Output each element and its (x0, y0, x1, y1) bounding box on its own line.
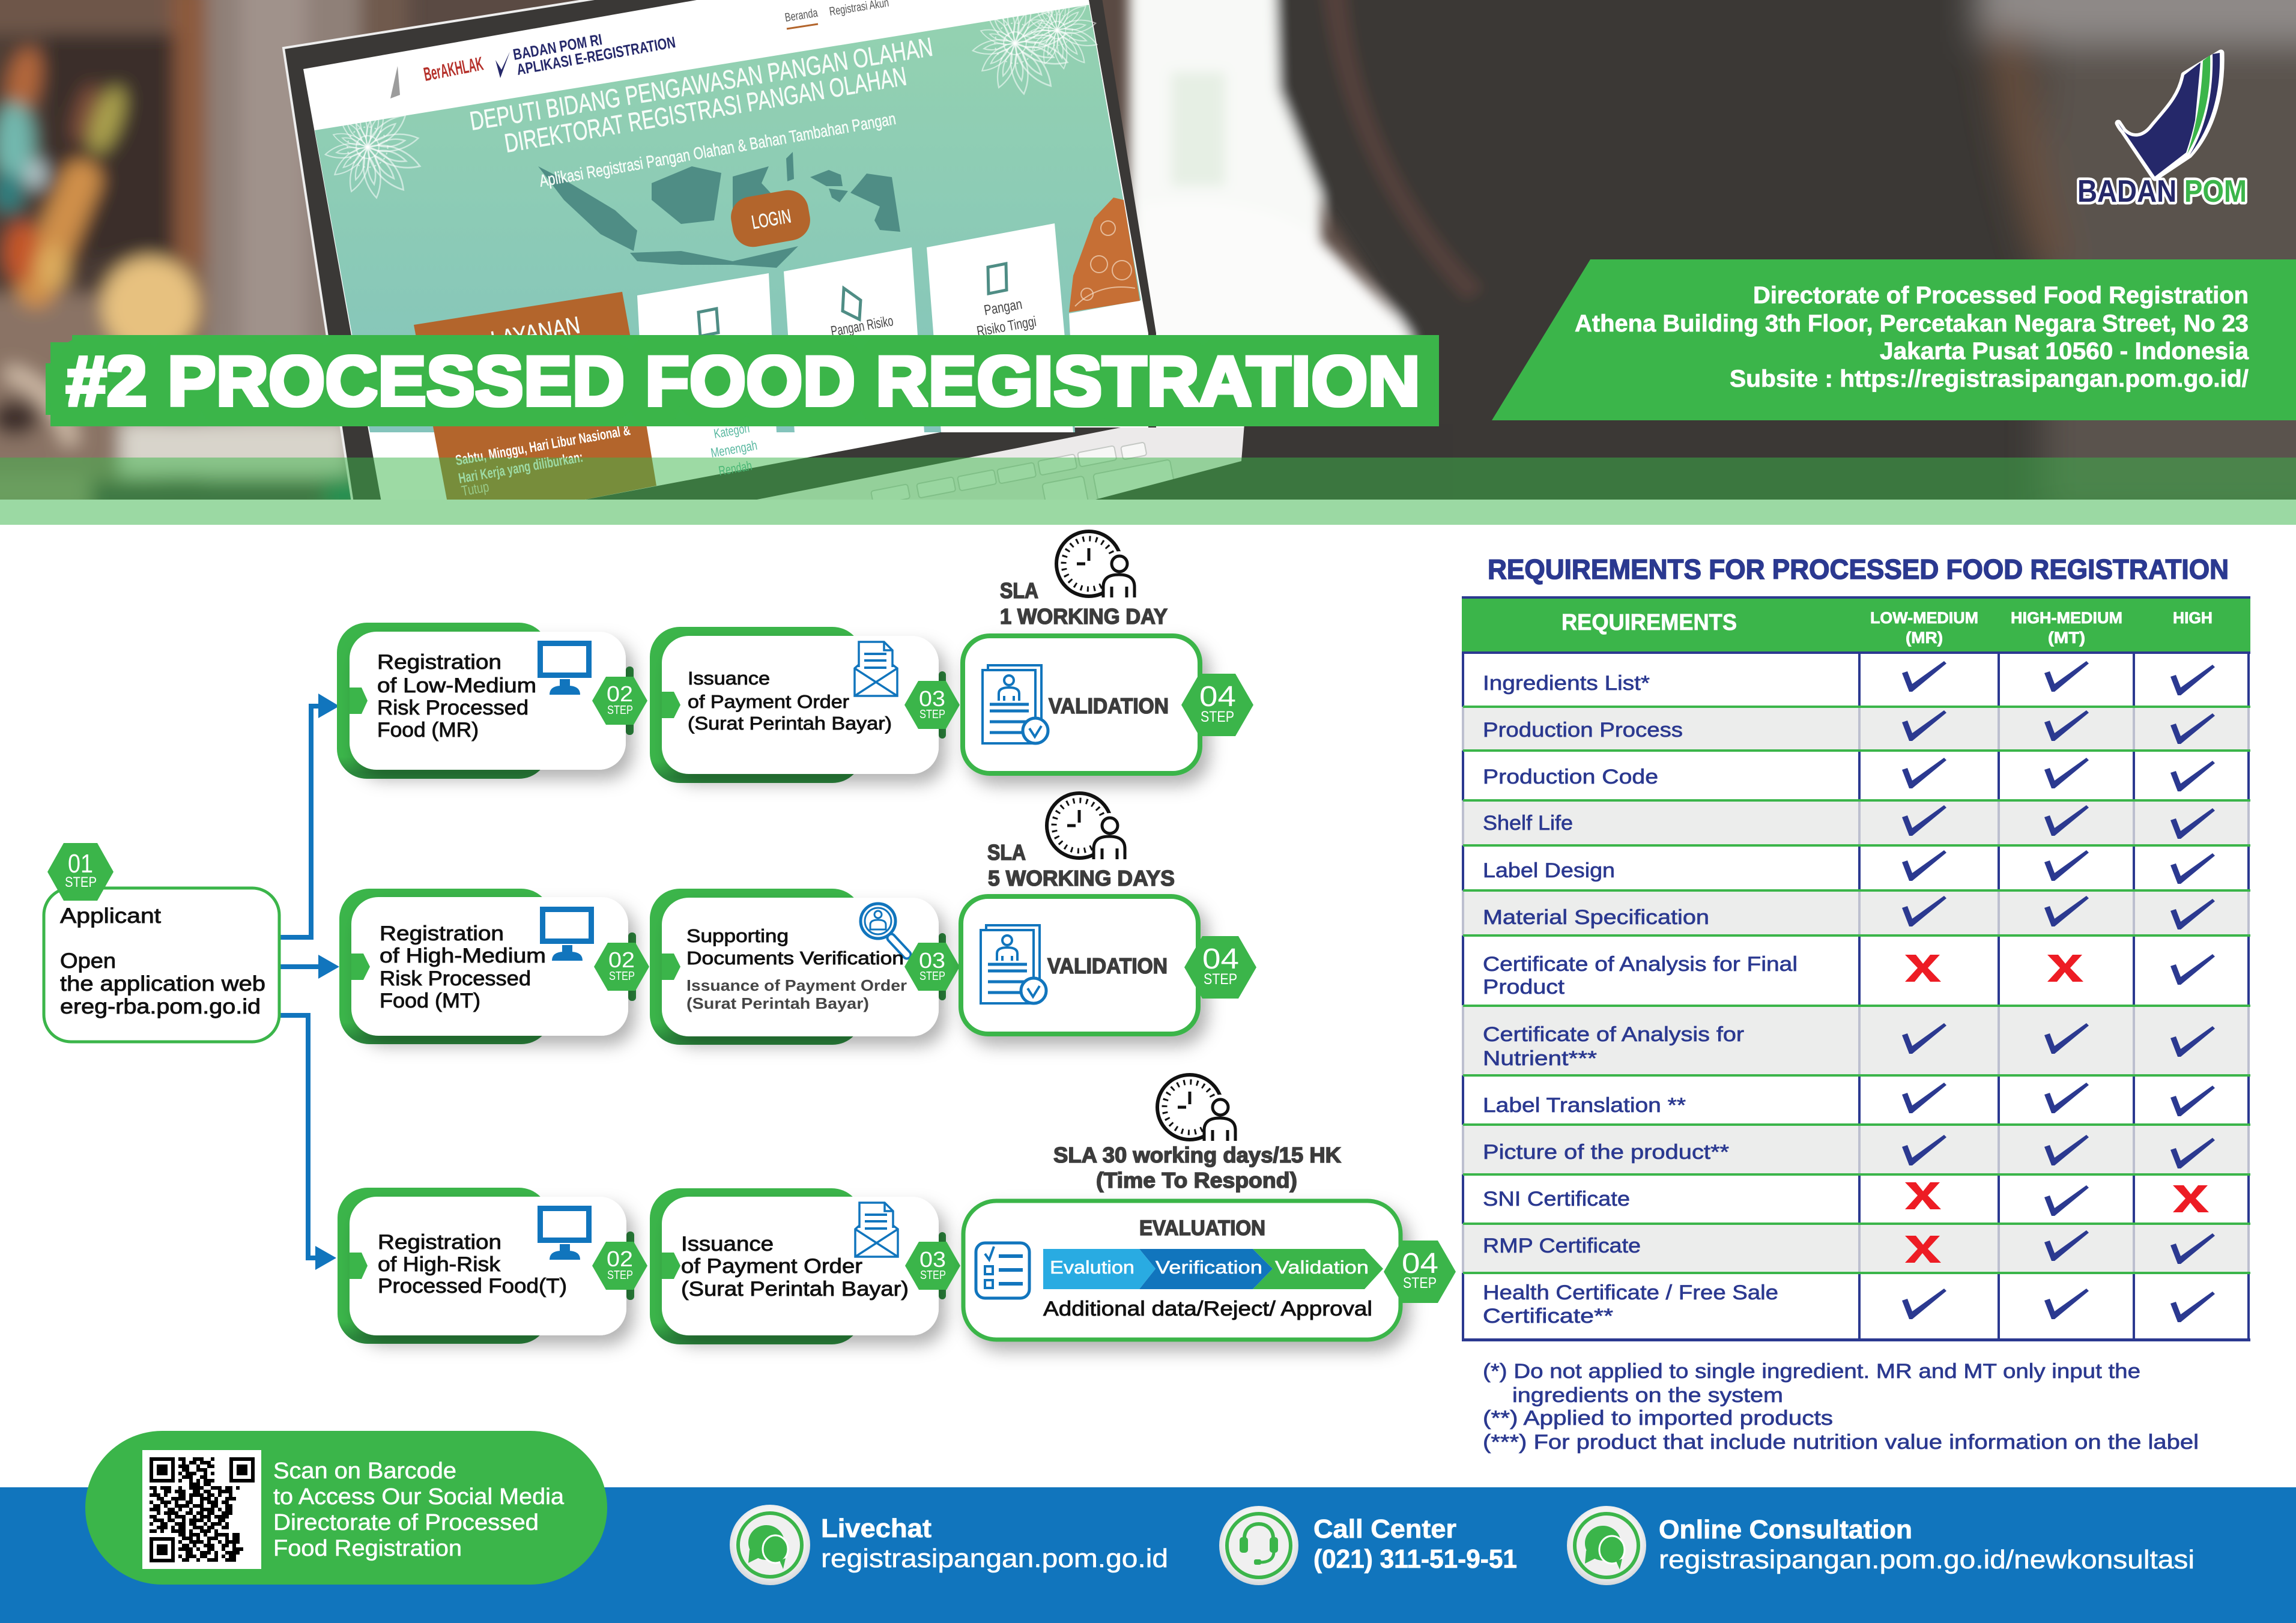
QR caption: Scan on Barcode (273, 1458, 456, 1484)
SLA text row 1: 1 WORKING DAY (1000, 604, 1168, 629)
card text (377, 651, 536, 742)
badge: step 04: 04 (1402, 1248, 1438, 1280)
title banner: #2 PROCESSED FOOD REGISTRATION (66, 342, 1420, 420)
QR caption: Food Registration (273, 1536, 462, 1561)
screen: top nav and logos: APLIKASI E-REGISTRATION (515, 33, 677, 79)
translucent green strip (0, 458, 2296, 501)
heading: requirements: REQUIREMENTS FOR PROCESSED FOOD REGISTRATION (1488, 554, 2229, 585)
badge: step 04: STEP (1204, 971, 1237, 988)
card text (688, 668, 892, 734)
icon: envelope with document (855, 1203, 898, 1257)
table footnotes (1483, 1360, 2199, 1454)
light green band (0, 500, 2296, 525)
card text: (Surat Perintah Bayar) (688, 713, 892, 734)
row: SNI Certificate: SNI Certificate (1483, 1188, 1630, 1210)
row: Health Certificate / Free Sale Certificate (1483, 1281, 2215, 1328)
contact: Online Consultation: Online Consultation (1659, 1515, 1912, 1544)
card text: Food (MT) (380, 990, 480, 1012)
screen: login button: LOGIN (750, 205, 793, 233)
laptop keyboard deck (742, 424, 1453, 510)
icon: headset (1219, 1506, 1298, 1585)
card text: Issuance (688, 668, 770, 689)
badge: step 02: STEP (607, 704, 633, 717)
panel: step 3 issuance of payment order row 3 (650, 1188, 960, 1344)
laptop bezel and chin (283, 0, 1156, 503)
card text: Registration (377, 651, 501, 674)
table footnotes: (**) Applied to imported products (1483, 1407, 1833, 1430)
panel: step 3 supporting documents verification (650, 889, 960, 1045)
badge: step 04: 04 (1202, 943, 1239, 975)
screen: top nav and logos (390, 0, 890, 98)
validation label: VALIDATION (1049, 694, 1169, 718)
applicant text (60, 904, 265, 1018)
contact: Livechat: registrasipangan.pom.go.id (821, 1544, 1168, 1573)
screen: top nav and logos: BerAKHLAK (422, 52, 485, 85)
SLA text row 1 (1000, 578, 1168, 629)
address text (1575, 282, 2249, 392)
table: requirements matrix (1462, 596, 2250, 1341)
panel: step 4 validation row 1 (963, 636, 1253, 773)
screen: Indonesia map (538, 152, 900, 268)
card text: Issuance (681, 1233, 774, 1256)
screen: login button (728, 187, 813, 250)
screen: lower panel text: Menengah (710, 438, 759, 461)
row: Label Translation: Label Translation ** (1483, 1094, 1686, 1117)
icon: SLA clock row 1 (1056, 531, 1134, 597)
screen: lower panel text: Kategori (713, 420, 751, 441)
badge: step 02 (592, 1242, 647, 1290)
table footnotes: (*) Do not applied to single ingredient. MR and MT only input the (1483, 1360, 2140, 1383)
row: Production Process: Production Process (1483, 719, 1683, 742)
row: Certificate of Analysis for Final Product (1483, 953, 2215, 999)
table header row: (MR) (1906, 629, 1943, 647)
row: Health Certificate / Free Sale Certificate: Certificate** (1483, 1305, 1613, 1328)
address text: Jakarta Pusat 10560 - Indonesia (1880, 338, 2249, 364)
row: Certificate of Analysis for Nutrient: Nutrient*** (1483, 1047, 1597, 1070)
table footnotes: ingredients on the system (1512, 1384, 1783, 1407)
row: Production Code: Production Code (1483, 766, 1658, 788)
panel: step 4 evaluation (963, 1201, 1456, 1340)
card subtext: Issuance of Payment Order (686, 976, 907, 994)
card text (686, 925, 904, 969)
QR caption (273, 1458, 565, 1561)
row: Label Design (1483, 850, 2215, 884)
screen: heading text: DIREKTORAT REGISTRASI PANGAN OLAHAN (502, 61, 909, 159)
icon: SLA clock row 3 (1157, 1075, 1235, 1141)
process arrow: evaluation, verification, validation: Verification (1156, 1257, 1262, 1278)
SLA text row 2: SLA (987, 840, 1026, 865)
card text: Documents Verification (686, 948, 904, 969)
row: Material Specification: Material Specification (1483, 906, 1709, 929)
arrow connectors from applicant to registration cards (277, 694, 339, 1270)
row: Certificate of Analysis for Final Product: Certificate of Analysis for Final (1483, 953, 1798, 976)
badge: step 01: 01 (68, 849, 93, 878)
process arrow: evaluation, verification, validation (1043, 1249, 1383, 1289)
laptop edge highlight (282, 0, 595, 500)
panel: directorate address (1492, 259, 2296, 420)
screen: lower panel text: Pangan Risiko (829, 313, 894, 340)
contact: Call Center: Call Center (1313, 1514, 1456, 1544)
icon: chat bubbles (730, 1505, 810, 1585)
card text: Registration (380, 922, 504, 945)
process arrow: evaluation, verification, validation: Evalution (1050, 1257, 1134, 1278)
screen: lower panel text: Sabtu, Minggu, Hari Libur Nasional & (454, 422, 632, 469)
screen: top nav and logos: BADAN POM RI (512, 30, 604, 64)
badge: step 02: STEP (607, 1269, 633, 1282)
panel: step 3 issuance of payment order row 1 (650, 627, 960, 783)
card text: Registration (378, 1231, 501, 1254)
row: Production Code (1483, 758, 2215, 791)
row: Shelf Life (1483, 805, 2215, 839)
row: Ingredients List (1483, 661, 2215, 695)
screen: heading text: Aplikasi Registrasi Pangan Olahan & Bahan Tambahan Pangan (538, 109, 897, 190)
applicant text: ereg-rba.pom.go.id (60, 995, 261, 1018)
row: Health Certificate / Free Sale Certificate: Health Certificate / Free Sale (1483, 1281, 1778, 1304)
panel: QR code pill (85, 1431, 607, 1585)
card text: of Low-Medium (377, 674, 536, 697)
card text: of Payment Order (681, 1255, 862, 1278)
screen: lower panel text (454, 296, 1038, 500)
table row fills and grid (1462, 654, 2250, 1341)
icon: SLA clock row 2 (1047, 793, 1125, 859)
screen paisley ornaments (324, 0, 1099, 199)
table footnotes: (***) For product that include nutrition value information on the label (1483, 1431, 2199, 1454)
badge: step 02 (592, 677, 647, 725)
header photo: laptop on a desk with blurred background (0, 0, 2296, 540)
icon: QR code (150, 1459, 253, 1561)
laptop screen (303, 0, 1148, 503)
panel: step 2 registration high risk (338, 1188, 647, 1344)
row: Certificate of Analysis for Nutrient (1483, 1023, 2215, 1070)
applicant text: Applicant (60, 904, 161, 928)
screen: heading text: DEPUTI BIDANG PENGAWASAN PANGAN OLAHAN (468, 32, 935, 136)
row: Picture of the product (1483, 1135, 2215, 1168)
badge: step 03 (905, 1242, 960, 1290)
card text: of High-Risk (378, 1253, 501, 1276)
row: RMP Certificate (1483, 1230, 2215, 1264)
screen: lower panel text: Pangan (983, 296, 1023, 319)
logo: Badan POM (2077, 53, 2247, 209)
SLA text row 2 (987, 840, 1175, 890)
contact: Livechat: Livechat (821, 1514, 931, 1543)
blurred white background and hair (1119, 0, 2053, 500)
outcome text: Additional data/Reject/ Approval (1043, 1298, 1372, 1320)
address text: Subsite : https://registrasipangan.pom.go.id/ (1730, 366, 2249, 392)
card text: Risk Processed (377, 697, 529, 719)
card text: Food (MR) (377, 719, 479, 742)
icon: validated document (983, 665, 1048, 743)
screen: lower panel text: Tutup (460, 479, 490, 500)
badge: step 03: 03 (919, 948, 945, 973)
icon: chat bubbles (1567, 1506, 1646, 1585)
card subtext (686, 976, 907, 1012)
SLA text row 3: SLA 30 working days/15 HK (1053, 1143, 1341, 1167)
badge: step 03: STEP (919, 970, 945, 983)
badge: step 03 (904, 681, 960, 729)
panel: step 2 registration MR (337, 623, 647, 779)
badge: step 01: STEP (65, 874, 97, 890)
applicant text: the application web (60, 972, 265, 996)
screen: lower panel text: Risiko Tinggi (975, 313, 1038, 340)
applicant text: Open (60, 949, 116, 973)
row: Label Translation (1483, 1083, 2215, 1117)
panel: step 4 validation row 2 (961, 896, 1256, 1034)
SLA text row 1: SLA (1000, 578, 1038, 603)
row: Certificate of Analysis for Final Product: Product (1483, 976, 1565, 999)
card text (681, 1233, 909, 1301)
badge: step 01 (47, 843, 114, 901)
badge: step 02: 02 (607, 1247, 633, 1271)
table header row: LOW-MEDIUM (1870, 609, 1978, 627)
card subtext: (Surat Perintah Bayar) (686, 994, 869, 1012)
QR caption: to Access Our Social Media (273, 1484, 565, 1510)
badge: step 03 (904, 943, 960, 991)
row: SNI Certificate (1483, 1182, 2209, 1216)
card text: (Surat Perintah Bayar) (681, 1278, 909, 1301)
contact: Online Consultation (1567, 1506, 2195, 1585)
row: Production Process (1483, 710, 2215, 744)
card text (378, 1231, 567, 1298)
icon: magnifier (861, 904, 907, 955)
SLA text row 3 (1053, 1143, 1341, 1192)
address text: Directorate of Processed Food Registration (1753, 282, 2249, 309)
QR caption: Directorate of Processed (273, 1510, 539, 1535)
process arrow: evaluation, verification, validation: Validation (1275, 1257, 1369, 1278)
icon: checklist (976, 1243, 1029, 1298)
row: Picture of the product: Picture of the product** (1483, 1141, 1729, 1164)
footer band (0, 1487, 2296, 1623)
card text: Processed Food(T) (378, 1275, 567, 1298)
badge: step 03: STEP (920, 1269, 946, 1282)
card text: of High-Medium (380, 944, 546, 967)
card text (380, 922, 546, 1012)
contact: Online Consultation: registrasipangan.pom.go.id/newkonsultasi (1659, 1545, 2195, 1574)
screen teal hero (315, 5, 1141, 432)
contact: Livechat (730, 1505, 1168, 1585)
badge: step 02: STEP (609, 970, 635, 983)
screen: heading text (468, 32, 935, 190)
badge: step 04 (1184, 936, 1256, 999)
badge: step 03: STEP (919, 708, 945, 721)
badge: step 02: 02 (607, 682, 633, 706)
card text: Supporting (686, 925, 789, 946)
card text: Risk Processed (380, 967, 531, 990)
row: Shelf Life: Shelf Life (1483, 812, 1573, 835)
row: Ingredients List: Ingredients List* (1483, 672, 1650, 695)
row: RMP Certificate: RMP Certificate (1483, 1235, 1641, 1257)
card text: of Payment Order (688, 691, 849, 712)
row: Label Design: Label Design (1483, 859, 1615, 882)
screen: lower panel text: Hari Kerja yang diliburkan: (457, 449, 584, 487)
icon: envelope with document (855, 642, 897, 696)
badge: step 04 (1384, 1241, 1456, 1303)
contact: Call Center (1219, 1506, 1517, 1585)
table header row: HIGH (2173, 609, 2213, 627)
badge: step 02: 02 (608, 948, 635, 972)
validation label: VALIDATION (1047, 954, 1168, 978)
table header row: HIGH-MEDIUM (2011, 609, 2122, 627)
table header row (1462, 596, 2250, 654)
table header row: REQUIREMENTS (1561, 610, 1737, 635)
logo wordmark: BADAN POM (2077, 174, 2247, 209)
icon: computer (541, 644, 589, 695)
screen: lower panel text: Rendah (718, 458, 753, 479)
panel: step 2 registration MT (339, 889, 649, 1044)
badge: step 03: 03 (919, 1247, 946, 1272)
evaluation heading: EVALUATION (1139, 1216, 1265, 1240)
table header row: (MT) (2048, 629, 2085, 647)
icon: validated document (981, 925, 1046, 1003)
screen: top nav and logos: Beranda (784, 7, 819, 25)
badge: step 04: STEP (1201, 709, 1234, 725)
screen: white service cards and orange panels (414, 198, 1140, 503)
row: Certificate of Analysis for Nutrient: Certificate of Analysis for (1483, 1023, 1744, 1046)
address text: Athena Building 3th Floor, Percetakan Negara Street, No 23 (1575, 310, 2249, 337)
badge: step 03: 03 (919, 686, 945, 711)
screen: lower panel text: LAYANAN (489, 312, 582, 354)
badge: step 02 (594, 943, 649, 991)
icon: computer (541, 1208, 589, 1260)
SLA text row 3: (Time To Respond) (1096, 1168, 1297, 1192)
icon: computer (543, 909, 591, 961)
row: Material Specification (1483, 896, 2215, 929)
SLA text row 2: 5 WORKING DAYS (988, 866, 1175, 890)
badge: step 04: STEP (1403, 1275, 1437, 1292)
badge: step 04: 04 (1199, 681, 1236, 713)
contact: Call Center: (021) 311-51-9-51 (1313, 1544, 1517, 1574)
panel: step 1 applicant (44, 843, 279, 1042)
badge: step 04 (1181, 674, 1253, 736)
